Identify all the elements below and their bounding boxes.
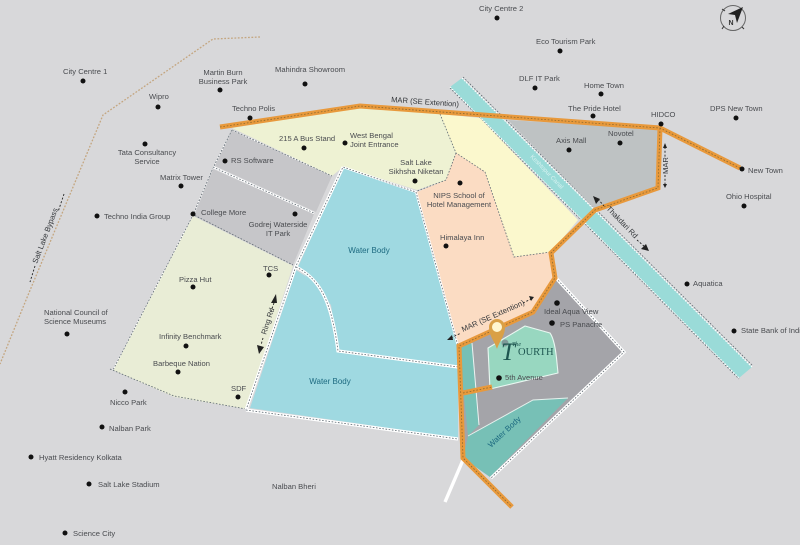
landmark labels: SDF (231, 384, 247, 393)
logo: The Fourth: OURTH (518, 347, 554, 358)
landmark labels: 5th Avenue (505, 373, 543, 382)
landmark labels: RS Software (231, 156, 274, 165)
canal label: Keshtopur Canal (529, 154, 564, 191)
logo: The Fourth (501, 339, 554, 366)
landmark labels: Tata Consultancy (118, 148, 176, 157)
water labels (309, 246, 523, 449)
landmark labels: Nicco Park (110, 398, 147, 407)
compass: N (728, 20, 734, 27)
landmark labels: City Centre 2 (479, 4, 523, 13)
landmark labels: Nalban Park (109, 424, 151, 433)
landmark labels: DPS New Town (710, 104, 763, 113)
label: Salt Lake Bypass: Salt Lake Bypass (30, 207, 60, 265)
water labels: Water Body (486, 415, 523, 449)
landmark labels: Business Park (199, 77, 247, 86)
compass (720, 6, 746, 30)
landmark labels: HIDCO (651, 110, 676, 119)
canal band (450, 77, 753, 379)
landmark labels: PS Panache (560, 320, 602, 329)
landmark labels: 215 A Bus Stand (279, 134, 335, 143)
landmark labels: Hotel Management (427, 200, 492, 209)
landmark labels: Himalaya Inn (440, 233, 484, 242)
landmark labels: Service (134, 157, 160, 166)
road: Salt Lake Bypass (0, 37, 260, 364)
landmark labels: DLF IT Park (519, 74, 560, 83)
landmark labels: Barbeque Nation (153, 359, 210, 368)
road label: MAR vertical with arrows: MAR (661, 157, 670, 174)
road label: MAR SE Extention with arrows (447, 296, 534, 340)
landmark labels: Martin Burn (203, 68, 243, 77)
landmark labels: Aquatica (693, 279, 723, 288)
zone: peach (417, 153, 555, 346)
zone: yellow green north (232, 107, 456, 190)
site boundary (491, 278, 624, 478)
logo: The Fourth: T (501, 339, 517, 366)
landmark labels: Salt Lake (400, 158, 432, 167)
landmark labels: NIPS School of (433, 191, 486, 200)
zone: grey commercial block east (508, 120, 660, 210)
landmark labels: College More (201, 208, 246, 217)
plot: The Fourth (488, 326, 558, 389)
landmark labels: TCS (263, 264, 278, 273)
zone: grey block one (215, 130, 332, 212)
landmark labels: Godrej Waterside (249, 220, 307, 229)
landmark labels: Hyatt Residency Kolkata (39, 453, 123, 462)
landmark labels: Matrix Tower (160, 173, 203, 182)
road label: Thakdari Rd with arrows: Thakdari Rd (605, 204, 640, 240)
landmark labels: Science City (73, 529, 115, 538)
water body by the site (463, 398, 568, 477)
zone: green block south west (113, 216, 293, 409)
water body south (250, 270, 458, 438)
location pin (489, 319, 505, 349)
landmark labels: Techno India Group (104, 212, 170, 221)
logo: The Fourth: The (512, 342, 521, 348)
landmark labels: Salt Lake Stadium (98, 480, 160, 489)
landmark labels: Sikhsha Niketan (389, 167, 443, 176)
road label: MAR SE Extention with arrows: MAR (SE Extention) (460, 298, 526, 334)
road label: MAR vertical with arrows (661, 143, 670, 188)
site ground (459, 279, 622, 477)
landmark labels: Wipro (149, 92, 169, 101)
landmark labels: National Council of (44, 308, 109, 317)
water labels: Water Body (348, 246, 390, 255)
landmark labels: Home Town (584, 81, 624, 90)
landmark labels: Nalban Bheri (272, 482, 316, 491)
landmark labels: New Town (748, 166, 783, 175)
landmark labels: Science Museums (44, 317, 106, 326)
road label: Ring Rd with arrows (257, 294, 277, 354)
road label: Thakdari Rd with arrows (593, 196, 649, 251)
landmark labels: Mahindra Showroom (275, 65, 345, 74)
zone: grey block two (194, 169, 314, 265)
water body north (298, 168, 458, 366)
white stub road (445, 460, 463, 502)
landmark labels: Pizza Hut (179, 275, 212, 284)
teal strip (459, 343, 479, 436)
landmark labels: Eco Tourism Park (536, 37, 596, 46)
road label: Ring Rd with arrows: Ring Rd (259, 307, 276, 336)
orange MAR roads (220, 106, 740, 507)
landmark labels: IT Park (266, 229, 290, 238)
landmark labels: Joint Entrance (350, 140, 399, 149)
landmark labels: City Centre 1 (63, 67, 107, 76)
landmark labels: The Pride Hotel (568, 104, 621, 113)
project site (459, 278, 624, 478)
water labels: Water Body (309, 377, 351, 386)
road label: MAR top: MAR (SE Extention) (391, 95, 460, 109)
landmark labels: Axis Mall (556, 136, 587, 145)
landmark labels: Techno Polis (232, 104, 275, 113)
landmark labels: Novotel (608, 129, 634, 138)
zone: pale yellow (440, 114, 578, 257)
landmark labels: West Bengal (350, 131, 393, 140)
zone boundaries (110, 114, 551, 439)
landmark labels: Infinity Benchmark (159, 332, 222, 341)
landmark labels: Ohio Hospital (726, 192, 772, 201)
landmark labels: Ideal Aqua View (544, 307, 599, 316)
